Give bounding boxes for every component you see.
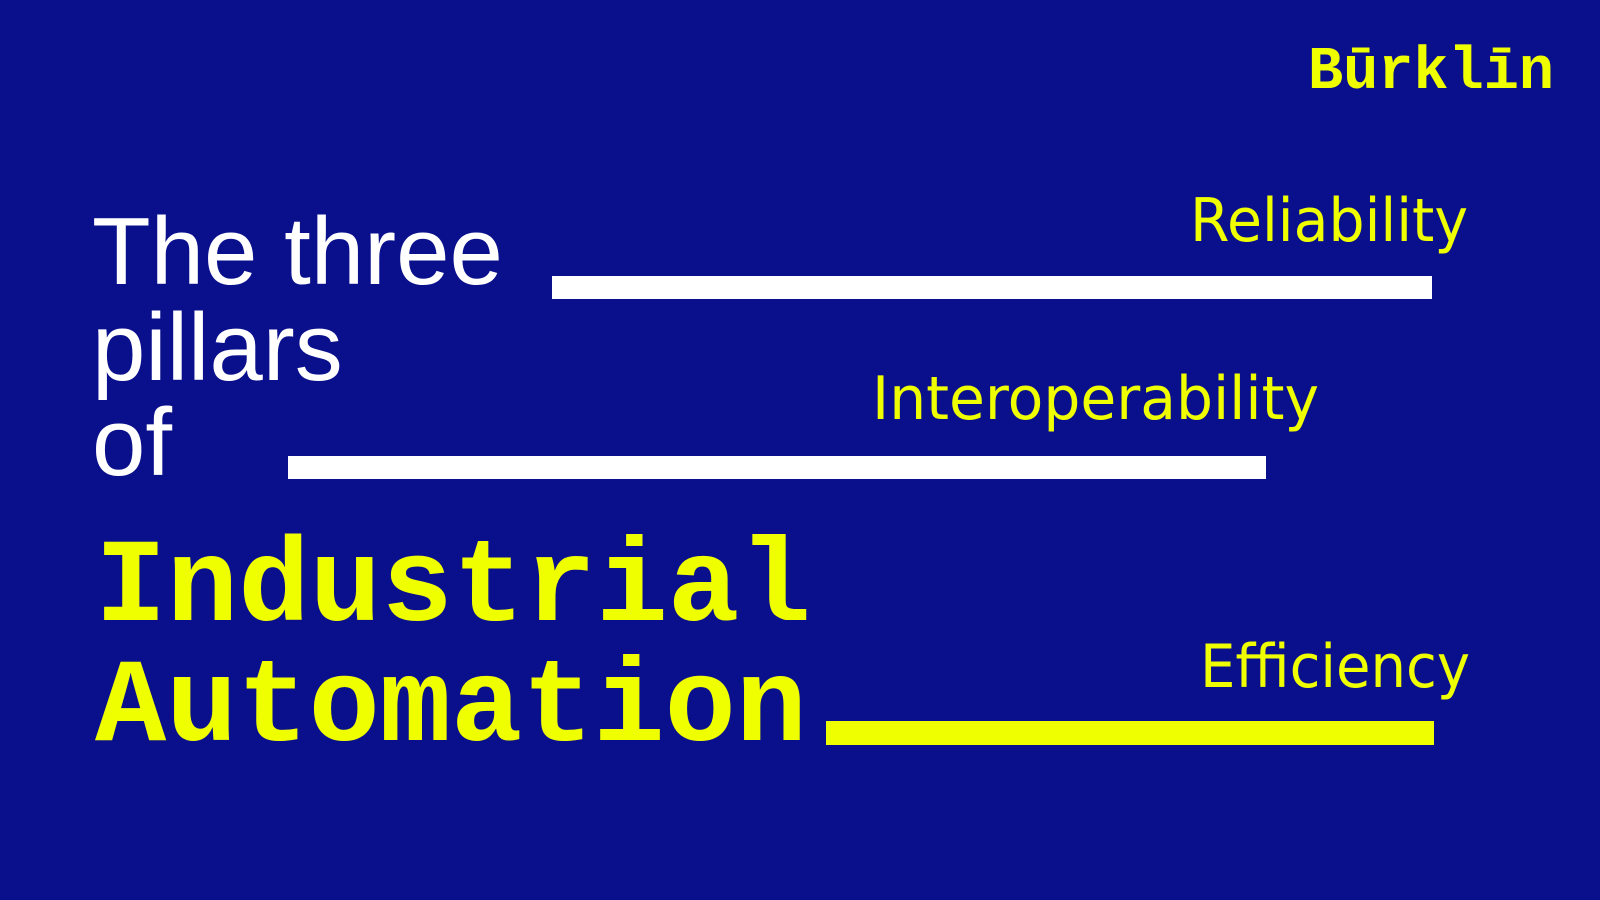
logo: Būrklīn (1308, 39, 1554, 107)
title: the three pillars of: The three (92, 198, 503, 305)
pillar: Reliability: Reliability (1190, 186, 1468, 256)
pillar: Interoperability: Interoperability (872, 364, 1319, 434)
title: Industrial Automation: Industrial (95, 521, 811, 656)
pillar: Efficiency (826, 632, 1470, 745)
pillar: Efficiency: Efficiency (1200, 632, 1470, 702)
title: the three pillars of (92, 198, 503, 496)
title: the three pillars of: of (92, 389, 172, 496)
title: Industrial Automation: Automation (95, 641, 807, 776)
pillar: Interoperability (288, 364, 1319, 479)
title: the three pillars of: pillars (92, 294, 343, 401)
pillar: Reliability (552, 186, 1468, 299)
title: Industrial Automation (95, 521, 811, 776)
